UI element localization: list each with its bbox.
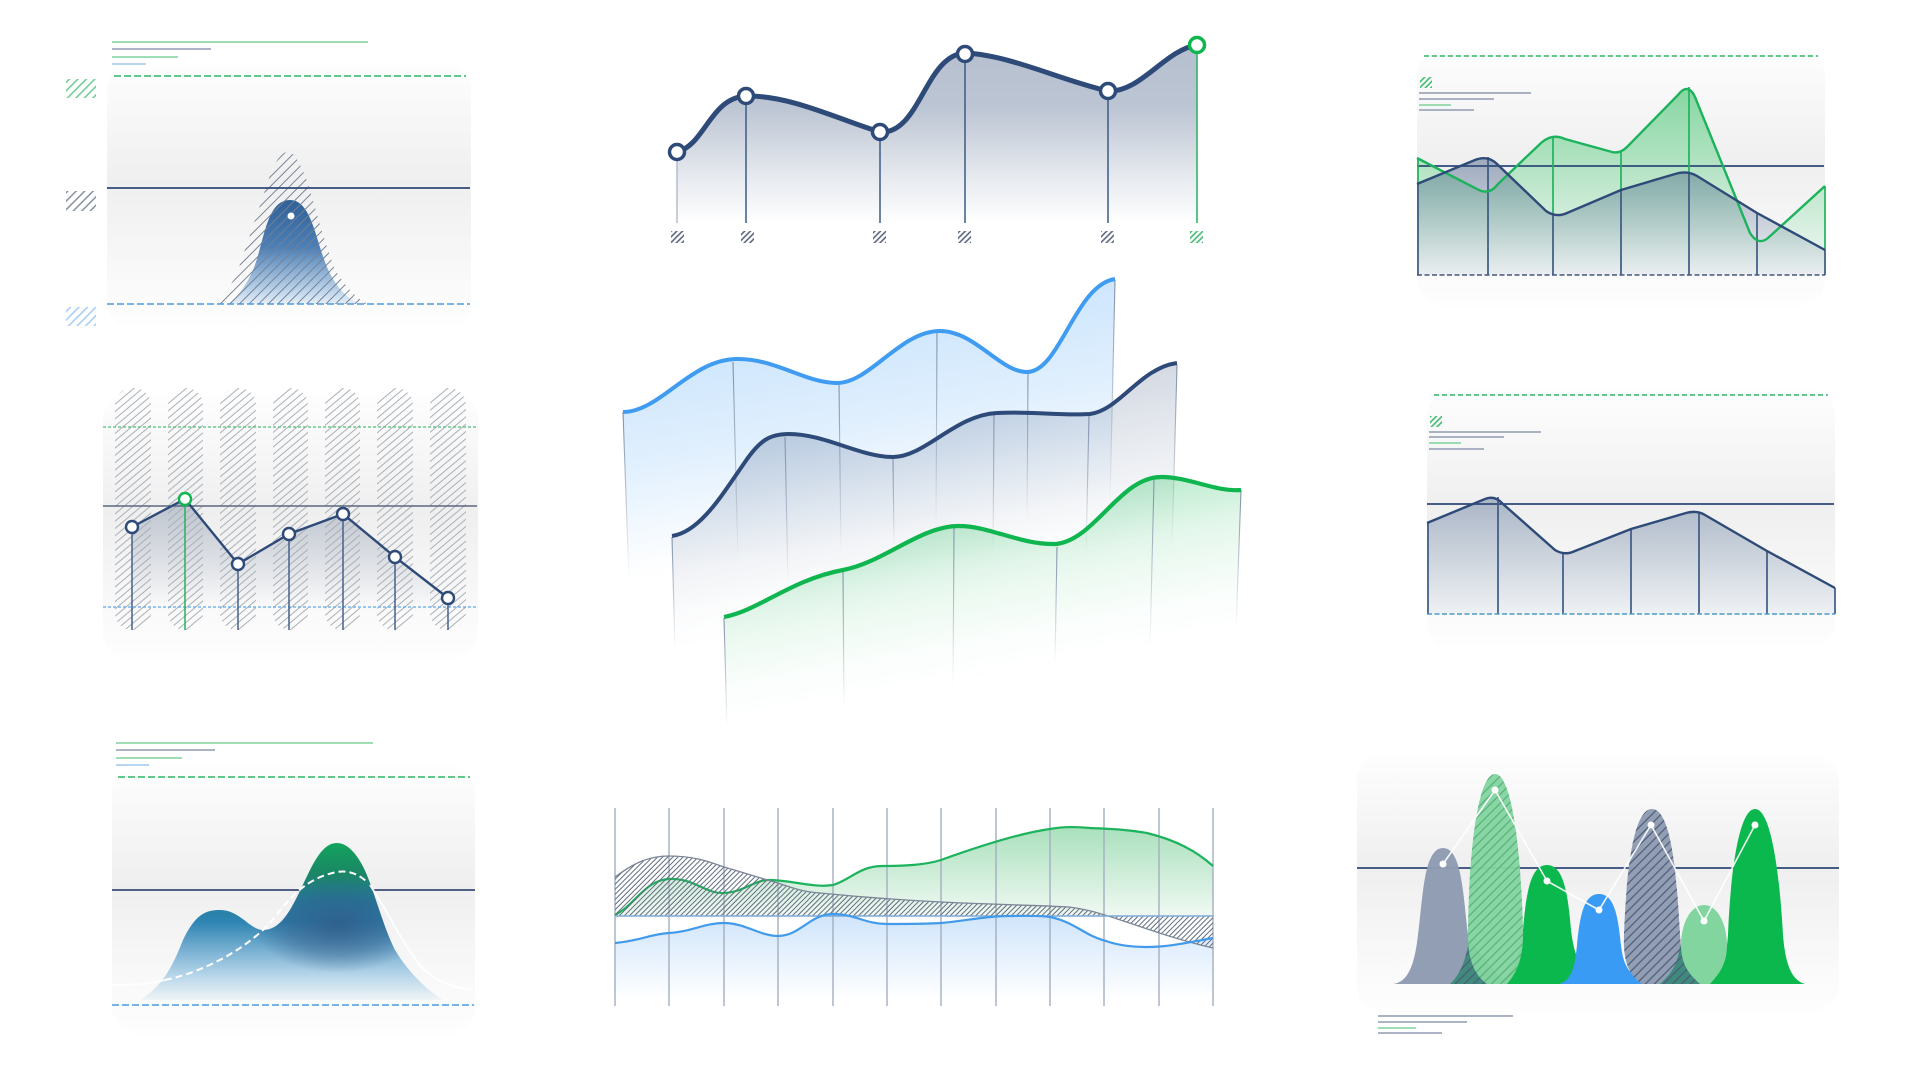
green curve	[724, 477, 1241, 617]
bottom dashed line	[1417, 274, 1825, 276]
panel: mid right navy area chart	[1427, 388, 1835, 650]
panel background	[1357, 753, 1839, 1013]
panel: top right green and navy area chart	[1417, 47, 1825, 307]
hatched peak	[212, 152, 368, 304]
legend text lines	[112, 42, 368, 64]
blue area	[615, 914, 1213, 1000]
bell 2 light green hatched	[1468, 774, 1523, 984]
mountain shape	[140, 843, 443, 1000]
solid blue peak	[228, 200, 360, 304]
green line	[1417, 89, 1825, 241]
green area	[1417, 89, 1825, 275]
vertical lines	[1418, 87, 1825, 275]
upper dashed line	[118, 776, 470, 778]
legend	[1429, 416, 1541, 449]
bell 7 green	[1695, 809, 1805, 984]
lower dashed line	[1427, 613, 1835, 615]
navy mean line	[107, 187, 470, 189]
chart: centre layered area curves	[623, 279, 1241, 727]
upper limit dashed line	[114, 75, 466, 77]
area fill	[677, 45, 1197, 223]
axis swatches	[671, 231, 1203, 243]
navy curve	[672, 363, 1177, 536]
mean line	[1427, 503, 1834, 505]
legend	[1419, 77, 1531, 110]
panel background	[107, 62, 471, 330]
panel: hatched columns line chart	[103, 388, 478, 660]
mean line	[1357, 867, 1839, 869]
navy fill	[672, 363, 1177, 650]
hatched swatches	[66, 79, 96, 326]
line	[1427, 498, 1835, 588]
bell 3 green	[1490, 865, 1605, 984]
white trend line	[112, 872, 473, 990]
panel background	[112, 765, 475, 1035]
markers	[670, 38, 1204, 160]
upper dashed line	[1434, 394, 1828, 396]
navy verticals	[672, 365, 1177, 650]
panel: single peak chart	[66, 42, 471, 330]
panel background	[1427, 388, 1835, 650]
blue lower dashed line	[107, 303, 470, 305]
area fill	[1427, 498, 1835, 614]
markers	[126, 493, 454, 604]
navy line	[1417, 158, 1825, 250]
green verticals	[724, 480, 1241, 727]
mountain navy core	[140, 843, 443, 1000]
green area	[615, 827, 1213, 916]
navy area	[1417, 158, 1825, 275]
peak marker	[288, 212, 294, 220]
hatched band outline	[615, 856, 1213, 948]
panel: bottom left mountain chart	[112, 743, 475, 1035]
chart: top centre smooth line with markers	[670, 38, 1204, 243]
blue fill	[623, 279, 1115, 580]
legend text lines	[1378, 1016, 1513, 1033]
bell 5 hatched grey	[1624, 809, 1702, 984]
reference lines	[103, 427, 477, 607]
trend line with markers	[1440, 786, 1758, 924]
green fill	[724, 477, 1241, 727]
vertical grid	[615, 808, 1213, 1006]
baseline	[615, 915, 1213, 917]
bell 6 light green	[1681, 905, 1727, 984]
vertical drop lines	[677, 45, 1197, 223]
vertical lines	[1428, 497, 1835, 614]
navy series	[672, 363, 1177, 650]
polyline	[132, 499, 448, 598]
blue series	[623, 279, 1115, 580]
blue line	[615, 914, 1213, 947]
panel: bottom right bell chart	[1357, 753, 1839, 1033]
legend text lines	[116, 743, 373, 765]
panel background	[1417, 47, 1825, 307]
overlap tail left	[1450, 940, 1505, 984]
bell 4 blue	[1558, 894, 1658, 984]
horizontal mean line	[1417, 165, 1824, 167]
upper dashed line	[1424, 55, 1818, 57]
blue verticals	[623, 280, 1115, 580]
bell 1 grey	[1393, 848, 1493, 984]
vertical lines	[132, 499, 448, 630]
lower dashed line	[112, 1004, 474, 1006]
hatched band	[615, 856, 1213, 948]
curve	[677, 45, 1197, 152]
mean line	[112, 889, 475, 891]
hatched columns	[115, 388, 466, 630]
green line	[615, 827, 1213, 915]
green series	[724, 477, 1241, 727]
blue curve	[623, 279, 1115, 412]
area shade under line	[132, 499, 448, 610]
panel background	[103, 392, 478, 660]
chart: bottom centre multi-line with hatched band	[615, 808, 1213, 1006]
